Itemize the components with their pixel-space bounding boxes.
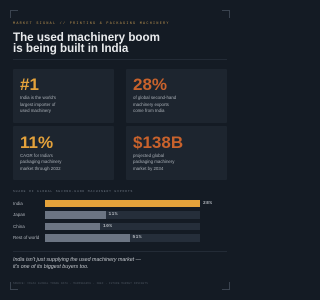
panel: share of exports [126,68,227,122]
quote: it's one of its biggest buyers too. [13,264,89,270]
stat description: CAGR for India's [20,153,53,158]
chart heading: SHARE OF GLOBAL SECOND-HAND MACHINERY EXPORTS [13,190,133,193]
stat description: of global second-hand [133,95,176,100]
corner mark: bottom right [222,282,230,290]
stat: $138B: $138B [133,132,183,152]
quote [13,257,141,270]
stat description: market through 2032 [20,166,61,171]
bar row: Rest of world: 51% [132,235,142,240]
stat description: India is the world's [20,95,56,100]
stat description [133,153,174,171]
bar row: Japan: 11% [108,212,118,217]
stat description: used machinery [20,108,51,113]
stat description: packaging machinery [20,159,62,164]
corner mark: top right [222,10,230,18]
bar row: India: India [13,200,23,206]
eyebrow: MARKET SIGNAL // PRINTING & PACKAGING MACHINERY [13,22,170,26]
title: The used machinery boom [13,30,160,44]
bar row: Rest of world [13,234,200,242]
stat description: largest importer of [20,102,55,107]
stat: 11%: 11% [20,132,53,152]
stat: #1: #1 [20,75,39,94]
stat description [20,153,62,171]
stat description: packaging machinery [133,159,174,164]
bar row: India: 28% [203,200,212,206]
bar row: Rest of world: Rest of world [13,235,39,240]
stat description: projected global [133,153,164,158]
bar row: China: China [13,224,25,228]
bar row: China: 10% [103,224,112,228]
stat description: market by 2034 [133,166,163,171]
bar row: China [13,223,200,230]
bar row: Japan: Japan [13,212,25,217]
corner mark: bottom left [10,282,18,290]
bar row: Japan [13,211,200,219]
stat description [20,95,56,113]
bar chart [13,200,212,242]
panel: market size [126,126,227,180]
stat description [133,95,176,113]
source: SOURCE: VOLZA GLOBAL TRADE DATA · MARKSEARCH · IBEF · FUTURE MARKET INSIGHTS [13,282,148,285]
stat description: come from India [133,108,164,113]
title: is being built in India [13,42,128,54]
stat: 28%: 28% [133,75,167,94]
bar row: India [13,200,212,207]
quote: India isn't just supplying the used machinery market — [13,257,141,263]
panel: largest importer [13,68,114,122]
corner mark: top left [10,10,18,18]
panel: CAGR [13,126,114,180]
stat description: machinery exports [133,102,169,107]
title [13,30,160,54]
